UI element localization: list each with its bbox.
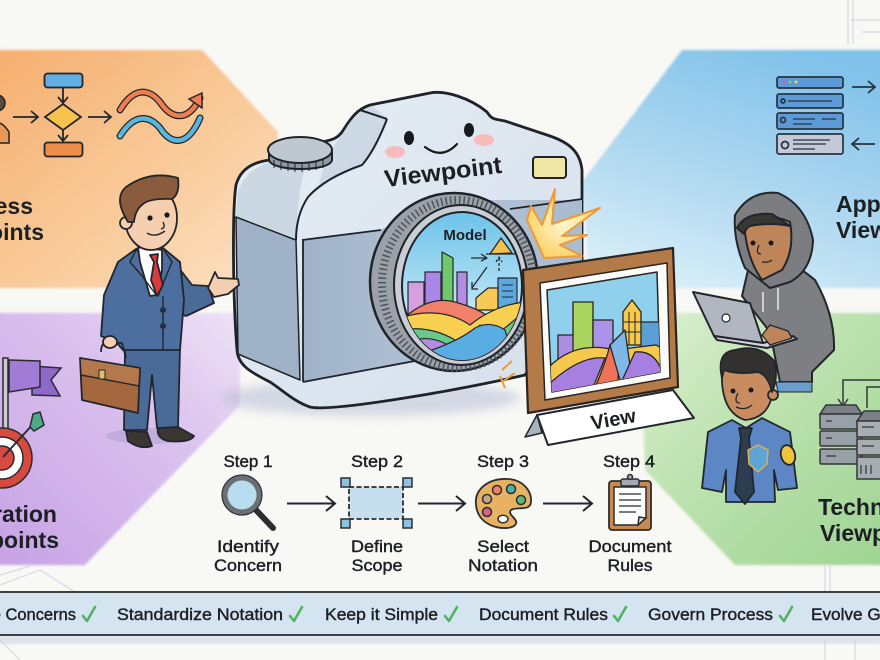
suit jacket <box>101 248 184 350</box>
icon: server racks <box>820 380 880 479</box>
step 1: identify concern: Identify <box>217 538 280 556</box>
left hand <box>103 336 117 348</box>
banner items: Document Rules <box>479 606 608 624</box>
heading: integration viewpoints <box>0 501 59 553</box>
step 3: select notation: Select <box>477 538 529 556</box>
front grey band <box>302 200 582 382</box>
banner items: Standardize Notation <box>117 606 283 624</box>
step 4: document rules <box>588 453 672 575</box>
shoes <box>126 431 152 447</box>
panel: application viewpoints <box>582 50 880 288</box>
icon: magnifier <box>222 475 273 528</box>
badge <box>748 445 768 472</box>
mat <box>540 263 670 400</box>
step 1: identify concern: Concern <box>214 557 282 575</box>
camera shadow <box>220 380 520 416</box>
character: developer in hoodie <box>693 193 834 392</box>
spark lines <box>500 361 515 388</box>
icon: scope rectangle with handles <box>341 478 412 528</box>
step 2: define scope: Define <box>351 538 403 556</box>
hair <box>120 175 178 222</box>
viewfinder window <box>533 157 566 178</box>
left side dark panel <box>236 217 300 380</box>
icon: flow waves <box>120 92 202 140</box>
label: Model: Model <box>443 227 487 244</box>
flash burst <box>527 189 600 258</box>
briefcase <box>101 342 126 358</box>
illustration: framed picture labelled View <box>500 248 694 445</box>
icon: paint palette <box>476 479 531 528</box>
trousers <box>124 348 180 430</box>
placard: View <box>537 390 694 445</box>
step 2: define scope <box>341 453 412 575</box>
heading: technology viewpoints <box>818 494 880 546</box>
heading: application viewpoints <box>836 191 880 243</box>
panel: technology viewpoints <box>640 313 880 565</box>
icon: person at left edge <box>0 95 9 143</box>
heading: business viewpoints <box>0 193 44 245</box>
banner items <box>0 606 880 624</box>
hood <box>735 193 813 288</box>
wooden frame <box>523 248 678 413</box>
top shading <box>236 144 318 238</box>
step 4: document rules: Rules <box>608 557 652 575</box>
arrow: step 3 to step 4 <box>543 496 592 511</box>
icon: process flowchart <box>13 74 111 156</box>
step 1: identify concern: Step 1 <box>224 453 272 471</box>
lens scene: city model <box>407 251 520 360</box>
step 3: select notation: Step 3 <box>477 453 529 471</box>
camera body <box>233 92 582 408</box>
dial <box>268 137 332 172</box>
step 2: define scope: Scope <box>352 557 402 575</box>
step 3: select notation <box>468 453 538 575</box>
shirt and tie <box>138 247 162 296</box>
banner: principles strip <box>0 592 880 644</box>
icon: flag <box>3 358 61 433</box>
picture <box>547 272 665 400</box>
model pointer arrows and shape <box>471 238 515 289</box>
panel: integration viewpoints <box>0 313 240 565</box>
character: businessman <box>80 175 239 447</box>
character: security officer <box>702 348 797 504</box>
hair <box>721 348 776 392</box>
tie <box>735 428 754 504</box>
face <box>147 215 153 221</box>
laptop <box>693 292 763 343</box>
step 3: select notation: Notation <box>468 557 538 575</box>
hoodie body <box>742 262 834 382</box>
head <box>125 186 177 250</box>
panel: business viewpoints <box>0 50 278 288</box>
step 4: document rules: Document <box>588 538 672 556</box>
process: four steps <box>214 453 672 575</box>
hoodie strings <box>763 288 778 312</box>
step 4: document rules: Step 4 <box>603 453 655 471</box>
placard: View: View <box>589 405 638 435</box>
uniform <box>702 418 797 502</box>
icon: clipboard <box>609 474 651 530</box>
lens <box>370 193 538 380</box>
step 1: identify concern <box>214 453 282 575</box>
check marks <box>83 607 792 621</box>
hand <box>762 325 792 345</box>
right arm and hand <box>176 272 214 316</box>
shoulder patch <box>779 444 797 466</box>
face <box>744 217 791 280</box>
illustration: camera labelled Viewpoint <box>233 92 600 408</box>
arrow: step 1 to step 2 <box>287 496 335 511</box>
icon: application layers stack <box>777 77 875 154</box>
head <box>722 370 775 420</box>
label: Viewpoint: Viewpoint <box>383 152 503 193</box>
camera face <box>385 123 494 158</box>
banner items: Keep it Simple <box>325 606 438 624</box>
frame stand <box>525 415 542 437</box>
banner items: Govern Process <box>648 606 773 624</box>
step 2: define scope: Step 2 <box>351 453 403 471</box>
icon: target with dart <box>0 412 44 488</box>
arrow: step 2 to step 3 <box>418 496 465 511</box>
